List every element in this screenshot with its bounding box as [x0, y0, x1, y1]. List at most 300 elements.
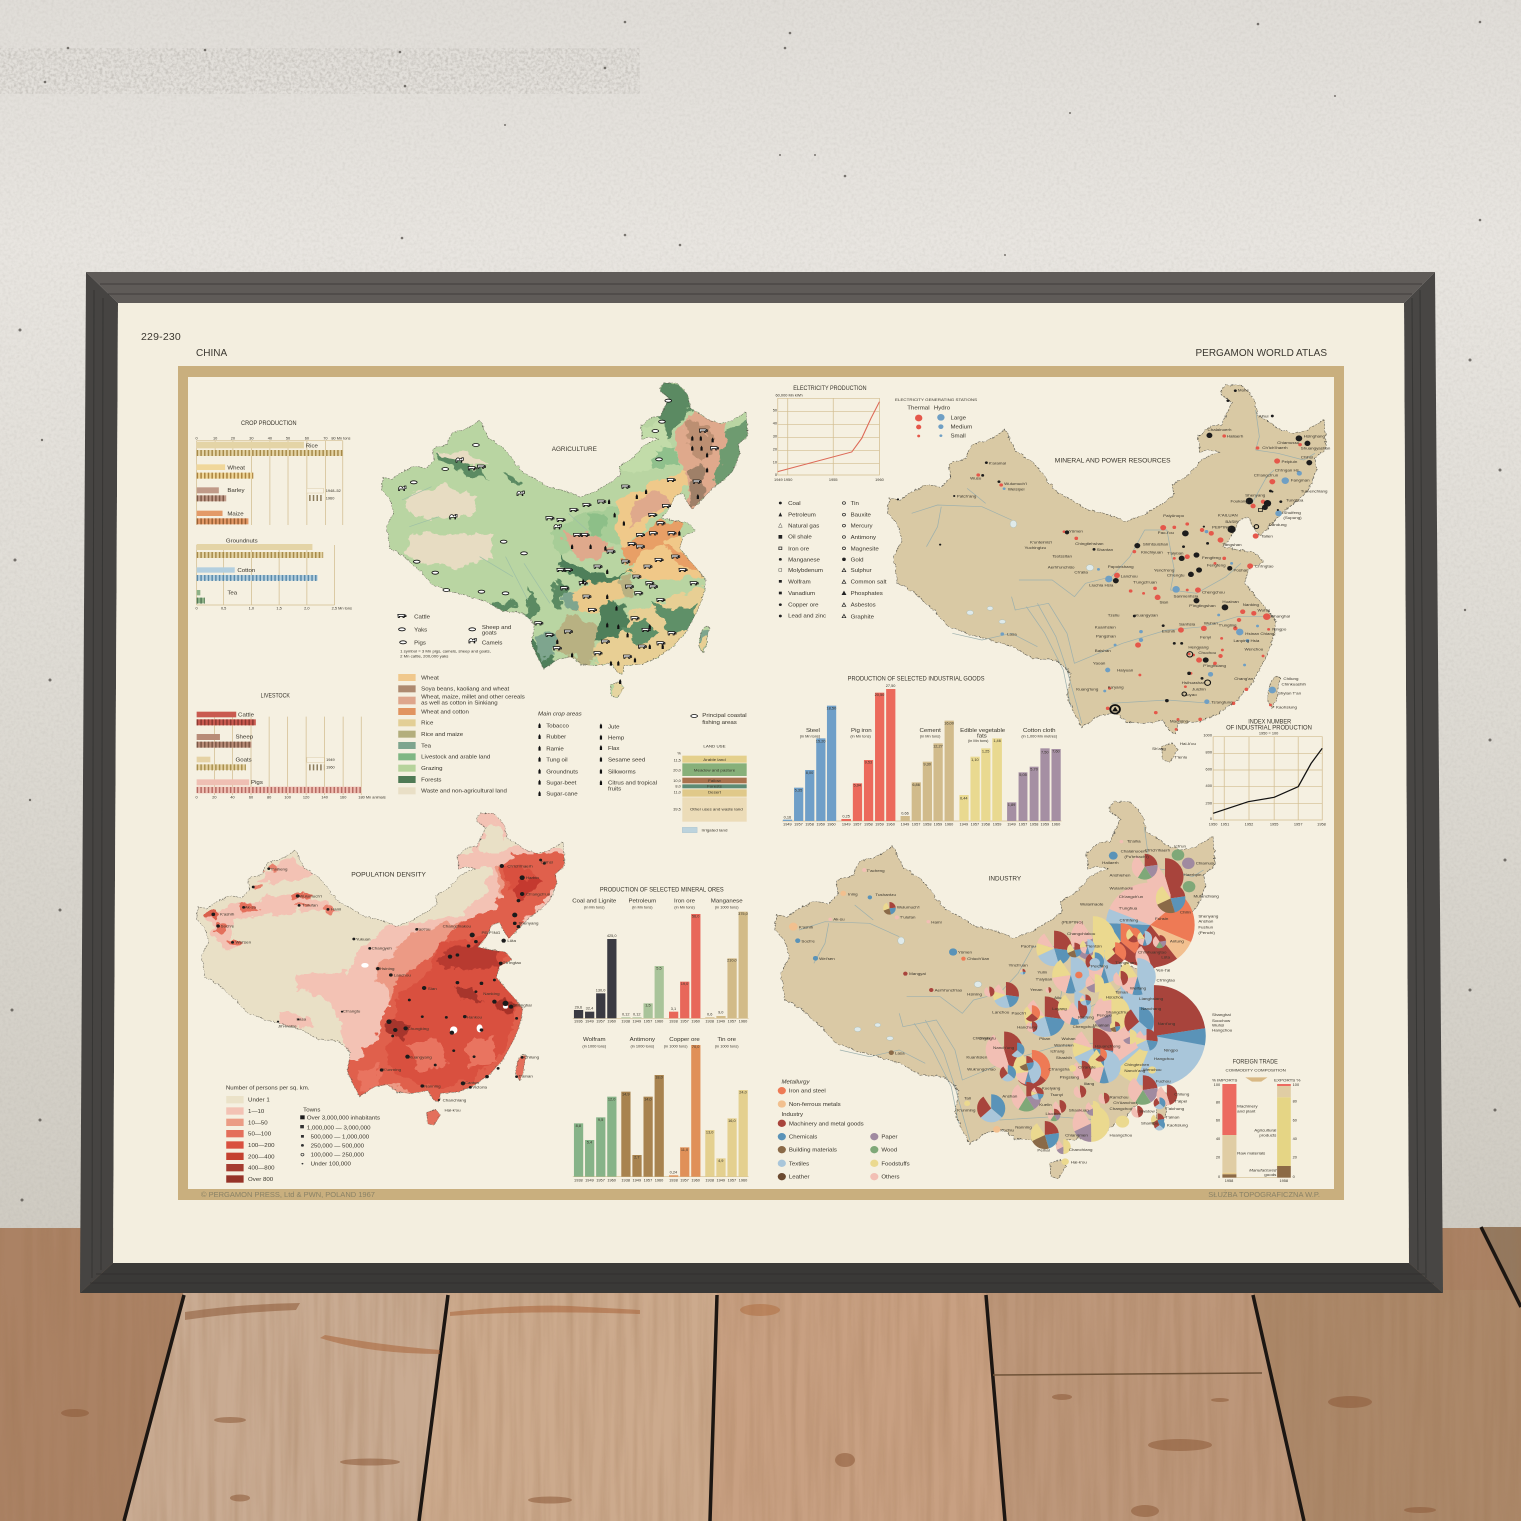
crop production chart: 50	[286, 436, 290, 440]
industry city names: Lasa	[895, 1051, 905, 1055]
production of selected industrial goods chart: 7,60	[1052, 749, 1060, 753]
mineral and power map: Poshan	[1233, 568, 1249, 573]
livestock chart: Goats	[235, 758, 252, 764]
mineral symbols legend: Copper ore	[788, 603, 819, 609]
population density map: Ch'angch'un	[526, 892, 551, 896]
towns legend: 250,000 — 500,000	[311, 1144, 364, 1149]
production of selected industrial goods chart: 1959	[875, 822, 884, 826]
population density map: Wei'sen	[235, 940, 252, 944]
mineral and power map: Tangshan	[1222, 542, 1242, 547]
mineral and power map: Ch'ingan Hs.	[1275, 468, 1300, 472]
industry city names: Ich'un	[1174, 844, 1187, 849]
production of selected mineral ores chart: 1938	[705, 1020, 714, 1024]
livestock symbol legend: 2 Mn cattle, 200,000 yaks	[400, 654, 448, 659]
production of selected industrial goods chart: 1,25	[982, 750, 989, 754]
production of selected industrial goods chart: 1958	[805, 822, 814, 826]
foreign trade chart: 80	[1216, 1100, 1220, 1104]
industry city names: Pingsiang	[1060, 1075, 1080, 1079]
main crop areas legend: Ramie	[546, 747, 564, 752]
livestock symbol legend: goats	[482, 631, 497, 637]
crop production chart: 70	[323, 436, 328, 440]
population density map: Ak-su	[245, 905, 257, 910]
industry city names: Anshiehen	[1110, 873, 1131, 878]
electricity production chart	[773, 385, 884, 482]
mineral and power map: Kuanhsien	[1095, 625, 1116, 630]
mineral and power map: Hsinghang	[1304, 434, 1326, 439]
population density map: Chilung	[524, 1055, 540, 1059]
production of selected mineral ores chart: 0,12	[622, 1012, 630, 1016]
foreign trade chart: 60	[1216, 1118, 1220, 1122]
production of selected mineral ores chart: Tin ore	[717, 1037, 736, 1043]
mineral and power map: Wusu	[970, 476, 982, 480]
livestock chart: 20	[212, 796, 217, 800]
index number of industrial production chart: 1952	[1245, 822, 1253, 826]
industry city names: Soochow	[1212, 1018, 1231, 1023]
livestock symbol legend	[398, 614, 511, 659]
population density map: Jih-k'atse	[278, 1024, 297, 1028]
population density map: K'ashih	[220, 912, 235, 917]
production of selected mineral ores chart: Manganese	[711, 899, 743, 904]
crop production chart: 0,5	[221, 606, 226, 610]
production of selected mineral ores chart: 1957	[728, 1020, 736, 1024]
industry city names: T'unghua	[1119, 906, 1138, 910]
industry city names: Ch'angsha	[1049, 1067, 1070, 1072]
foreign trade chart: 1958	[1279, 1179, 1288, 1183]
production of selected mineral ores chart: 1960	[655, 1178, 663, 1182]
production of selected industrial goods chart: 5,35	[795, 788, 802, 792]
production of selected industrial goods chart: 1949	[842, 822, 851, 826]
livestock chart: 160	[340, 796, 346, 800]
foreign trade chart: 40	[1216, 1137, 1220, 1141]
land-type colour legend: Waste and non-agricultural land	[421, 789, 507, 795]
crop production chart: 10	[213, 436, 217, 440]
persons per square km legend: 1—10	[248, 1109, 264, 1115]
production of selected mineral ores chart: 1957	[596, 1178, 605, 1182]
industry city names: Lüta	[1161, 955, 1171, 959]
production of selected industrial goods chart: 9,53	[865, 760, 872, 764]
mineral and power map: Kuang'lung	[1076, 687, 1099, 692]
crop production chart: 30	[249, 436, 254, 440]
electricity production chart: 1955	[829, 478, 838, 482]
population density map: PEIP'ING	[481, 930, 500, 935]
population density map: Hsining	[380, 966, 395, 971]
crop production chart: 1948–52	[326, 489, 341, 493]
mineral and power map: Papoinshang	[1108, 564, 1134, 569]
industry city names: Changchou	[1110, 1106, 1133, 1111]
production of selected mineral ores chart: 0,24	[670, 1170, 677, 1174]
industry city names: Liuchou	[1046, 1111, 1062, 1116]
production of selected industrial goods chart: 1958	[981, 822, 990, 826]
industry city names: Hsuanch'eng	[1095, 1044, 1121, 1048]
industry city names: Paot'ou	[1021, 944, 1036, 949]
mineral and power map: Ch'ingtao	[1255, 564, 1274, 568]
livestock symbol legend: Yaks	[414, 628, 427, 634]
industry city names: Nant'ung	[1158, 1021, 1176, 1026]
mineral symbols legend: Gold	[851, 558, 863, 563]
mineral and power map: Nanking	[1243, 602, 1260, 607]
production of selected industrial goods chart: 6,86	[912, 783, 920, 787]
mineral symbols legend: Vanadium	[788, 591, 815, 597]
mineral and power map: Hailaerh	[1227, 434, 1244, 438]
mineral and power map: Juichin	[1192, 687, 1207, 691]
production of selected mineral ores chart: 1957	[644, 1178, 652, 1182]
production of selected industrial goods chart: 1959	[993, 822, 1001, 826]
population density map: Harbin	[526, 875, 540, 880]
industry city names: Tsinan	[1115, 990, 1129, 994]
mineral and power map: Ch'angch'un	[1254, 473, 1279, 478]
main crop areas legend: Tobacco	[546, 724, 569, 730]
atlas name: PERGAMON WORLD ATLAS	[1195, 348, 1327, 359]
production of selected mineral ores chart: 1949	[633, 1178, 641, 1182]
industry city names: Anshan	[1002, 1094, 1018, 1098]
production of selected mineral ores chart: 3,1	[671, 1007, 676, 1011]
mineral and power map: Wuhsi	[1258, 608, 1270, 612]
mineral and power map: Shuifeng	[1283, 510, 1302, 515]
livestock chart: 40	[230, 796, 235, 800]
production of selected industrial goods chart: 1960	[1052, 822, 1060, 826]
mineral and power map: Fengfeng	[1202, 555, 1221, 560]
industry city names: Ts'aiha	[1127, 839, 1141, 844]
production of selected mineral ores chart: 1957	[644, 1020, 652, 1024]
industry city names: Kuanhsien	[966, 1055, 988, 1059]
production of selected mineral ores chart: 1938	[669, 1020, 678, 1024]
mineral symbols legend: Molybdenum	[788, 568, 823, 574]
land use chart: Meadow and pasture	[694, 768, 736, 772]
mineral and power map: Chingtiehshan	[1075, 541, 1104, 546]
industry city names: Ich'ang	[1050, 1049, 1065, 1053]
crop production chart: Tea	[227, 591, 238, 597]
mineral and power map: Sian	[1159, 600, 1169, 604]
mineral and power map: Aerhl'unchiüo	[1048, 565, 1075, 570]
persons per square km legend: 100—200	[248, 1143, 274, 1149]
production of selected mineral ores chart: 5,4	[587, 1141, 592, 1145]
livestock symbol legend: Sheep and	[482, 625, 511, 631]
industry city names: Ch'engtu	[978, 1036, 997, 1040]
land use chart: 11,5	[674, 758, 681, 762]
livestock chart: Sheep	[235, 735, 253, 740]
production of selected mineral ores chart: 8,8	[576, 1124, 581, 1128]
production of selected mineral ores chart: 1938	[669, 1178, 678, 1182]
mineral and power map: Tunghua	[1286, 498, 1304, 503]
index number of industrial production chart: 0	[1210, 817, 1212, 821]
industry city names: Wuhan	[1061, 1036, 1076, 1041]
mineral and power map: Shanghai	[1271, 614, 1290, 619]
industry pie legend	[778, 1080, 910, 1181]
mineral and power map: Hai-k'ou	[1180, 741, 1197, 746]
main crop areas legend: Sugar-cane	[546, 792, 578, 798]
industry city names: T'angshan	[1115, 960, 1136, 965]
industry city names: Chingtechen	[1124, 1062, 1150, 1067]
mineral and power map: Yaoan	[1093, 661, 1106, 665]
mineral and power map: Maoming	[1170, 719, 1189, 724]
mineral and power map: Kinchiyuan	[1141, 550, 1163, 555]
electricity production chart: 1949 1950	[774, 478, 792, 482]
mineral and power map: Liuchia Hsia	[1089, 583, 1114, 588]
mineral symbols legend: Wolfram	[788, 580, 811, 585]
production of selected industrial goods chart: 18,50	[827, 706, 836, 710]
land-type colour legend	[398, 674, 525, 795]
industry city names: Shenyang	[1198, 914, 1219, 919]
main crop areas legend: Tung oil	[546, 758, 568, 763]
mineral symbols legend: Magnesite	[851, 547, 879, 552]
industry pie legend: Machinery and metal goods	[789, 1122, 864, 1127]
land-type colour legend: Livestock and arable land	[421, 755, 490, 761]
industry city names: Yümen	[958, 950, 973, 954]
industry city names: T'aichung	[1165, 1106, 1185, 1111]
land-type colour legend: Tea	[421, 744, 432, 749]
industry city names: Weifang	[1130, 986, 1147, 990]
production of selected industrial goods chart: 1960	[827, 822, 836, 826]
production of selected mineral ores chart: 11,0	[681, 1148, 688, 1152]
production of selected industrial goods chart: 1958	[1030, 822, 1038, 826]
industry city names: Hangchou	[1154, 1056, 1175, 1061]
index number of industrial production chart: 400	[1206, 784, 1212, 788]
mineral symbols legend: Mercury	[851, 524, 873, 530]
industry city names: Shaokuan	[1069, 1108, 1090, 1113]
sheet title: CHINA	[196, 348, 227, 359]
foreign trade chart: Raw materials	[1237, 1151, 1265, 1155]
production of selected mineral ores chart: 9,5	[598, 1118, 603, 1122]
production of selected industrial goods chart: 1959	[1041, 822, 1049, 826]
industry city names: Wulumuch'i	[897, 905, 920, 909]
main crop areas legend: Citrus and tropical	[608, 781, 657, 786]
mineral and power map: Chihsi	[1301, 455, 1313, 459]
mineral symbols legend: Manganese	[788, 558, 820, 563]
index number of industrial production chart: INDEX NUMBER	[1248, 719, 1292, 725]
crop production chart: 80 Mn tons	[331, 436, 351, 440]
production of selected industrial goods chart: 0,16	[784, 816, 791, 820]
production of selected industrial goods chart: 1957	[912, 822, 920, 826]
electricity production chart: 10	[773, 461, 777, 465]
mineral and power map: Sanmenhsia	[1174, 594, 1199, 599]
land use chart: 10,0	[673, 779, 681, 783]
mineral and power map: Foukang	[1231, 499, 1248, 504]
foreign trade chart: 0	[1218, 1175, 1220, 1179]
population density map: Soch'e	[221, 924, 235, 929]
mineral and power map: Chiamussu	[1277, 440, 1300, 445]
frame left rail	[80, 272, 118, 1293]
crop production chart	[196, 420, 352, 610]
population density map: Nanking	[483, 991, 500, 996]
population density map: Ch'ingtao	[503, 960, 522, 965]
foreign trade chart: 100	[1214, 1083, 1220, 1087]
population density map: Chungking	[407, 1026, 429, 1031]
persons per square km legend: 10—50	[248, 1121, 268, 1126]
mineral and power map: Shuangyashan	[1301, 446, 1331, 450]
main crop areas legend: Hemp	[608, 736, 624, 742]
industry city names: Loyang	[1052, 1006, 1067, 1011]
foreign trade chart: goods	[1264, 1172, 1276, 1177]
electricity production chart: 0	[775, 473, 777, 477]
industry city names: T'ulufan	[900, 915, 916, 920]
mineral and power map: Ts'angtung	[1211, 700, 1233, 704]
crop production chart: 20	[231, 436, 235, 440]
industry city names: Chiamusu	[1196, 861, 1216, 865]
mineral and power map: Aihui	[1259, 414, 1269, 418]
livestock chart: LIVESTOCK	[261, 693, 291, 699]
industry city names: Peihai	[1037, 1148, 1050, 1153]
population density map: Hami	[331, 907, 341, 912]
production of selected mineral ores chart: 14,0	[644, 1098, 652, 1102]
industry city names: Hanchung	[1017, 1025, 1038, 1029]
population density map	[197, 810, 572, 1143]
land-type colour legend: Forests	[421, 778, 442, 783]
livestock chart: 0	[196, 796, 198, 800]
land use chart: Fallow	[708, 778, 722, 783]
production of selected mineral ores chart: (in 1000 tons)	[715, 906, 739, 910]
foreign trade chart: 80	[1293, 1100, 1297, 1104]
main crop areas legend: Groundnuts	[546, 770, 578, 775]
population density map: Lasa	[297, 1017, 307, 1022]
mineral and power map: T'ienlu	[1174, 755, 1188, 760]
production of selected mineral ores chart: 0,12	[633, 1012, 641, 1016]
crop production chart: Wheat	[227, 466, 245, 471]
industry city names: T'ientsin	[1086, 944, 1103, 948]
mineral and power map: Tzeliu	[1108, 613, 1120, 618]
production of selected industrial goods chart: Pig iron	[851, 728, 872, 734]
electricity production chart: 20	[773, 448, 777, 452]
mineral and power map: Tsotssitan	[1052, 554, 1073, 559]
mineral and power map: Chengchou	[1202, 590, 1225, 594]
land use chart: Irrigated land	[702, 828, 728, 833]
index number of industrial production chart	[1203, 719, 1326, 826]
industry city names: Iliang	[1084, 1081, 1095, 1086]
towns legend: 1,000,000 — 3,000,000	[307, 1126, 371, 1131]
mineral symbols legend: Sulphur	[851, 568, 872, 574]
land use chart: %	[677, 751, 682, 755]
main crop areas legend: Jute	[608, 725, 619, 730]
production of selected mineral ores chart: 1949	[633, 1020, 641, 1024]
livestock chart: 80	[267, 796, 271, 800]
industry city names: Ining	[848, 892, 858, 896]
mineral symbols legend: Antimony	[851, 535, 876, 541]
city industry pies	[789, 840, 1195, 1165]
electricity production chart: 40	[773, 421, 777, 425]
crop production chart: 0	[196, 606, 198, 610]
industry city names: Antung	[1170, 939, 1185, 943]
production of selected industrial goods chart: 0,44	[960, 796, 968, 800]
industry city names: Yinch'uan	[1009, 963, 1028, 968]
industry city names: Ailu	[1054, 995, 1062, 1000]
mineral and power map: Tumenchiang	[1301, 489, 1328, 493]
persons per square km legend: Under 1	[248, 1098, 270, 1104]
Shanghai-region pie	[1128, 1011, 1180, 1061]
production of selected mineral ores chart: 1938	[705, 1178, 714, 1182]
population density map: Hankou	[467, 1015, 483, 1019]
index number of industrial production chart: OF INDUSTRIAL PRODUCTION	[1226, 725, 1312, 732]
mineral symbols legend: Graphite	[851, 615, 874, 620]
population density map: K'unming	[383, 1067, 402, 1072]
main crop areas legend: Silkworms	[608, 770, 636, 776]
mineral and power map: Yench'eng	[1154, 568, 1175, 573]
panel: mineral and power resources with electricity and industrial charts	[772, 384, 1331, 826]
production of selected mineral ores chart: 14,9	[622, 1092, 630, 1096]
crop production chart: 1960	[326, 496, 334, 500]
frame right rail	[1404, 272, 1443, 1293]
production of selected mineral ores chart: 1957	[596, 1020, 605, 1024]
industry city names: Yulin	[1037, 970, 1048, 974]
livestock chart: Cattle	[238, 713, 254, 718]
production of selected industrial goods chart: 16,00	[944, 721, 954, 725]
production of selected mineral ores chart: 24,0	[739, 1091, 747, 1095]
production of selected mineral ores chart: 16,0	[728, 1119, 736, 1123]
population density map: Changchiakou	[443, 924, 472, 928]
mineral and power map: Fenyi	[1200, 635, 1211, 640]
production of selected mineral ores chart: 1957	[680, 1178, 689, 1182]
production of selected mineral ores chart: Iron ore	[674, 899, 695, 904]
industry city names: Lianghsiang	[1139, 996, 1164, 1001]
population density map: Sian	[428, 986, 437, 991]
industry city names: Aerhl'unch'iao	[935, 988, 963, 992]
main crop areas legend	[538, 712, 747, 798]
index number of industrial production chart: 1951	[1221, 822, 1229, 826]
index number of industrial production chart: 1958	[1317, 822, 1326, 826]
production of selected mineral ores chart: 4,9	[718, 1159, 723, 1163]
population density map: Paot'ou	[416, 927, 431, 931]
land-type colour legend: Soya beans, kaoliang and wheat	[421, 687, 510, 693]
industry map: INDUSTRY	[989, 876, 1022, 883]
mineral and power map: K'aramai	[989, 461, 1006, 465]
industry city names: Yen-t'ai	[1156, 968, 1170, 972]
mineral and power map: Hsihuashan	[1182, 680, 1206, 685]
mineral and power map: Chinkuashih	[1282, 682, 1307, 686]
mineral and power map: Wulumuch'i	[1004, 481, 1027, 486]
mineral symbols legend: Asbestos	[851, 603, 876, 609]
industry city names	[799, 839, 1233, 1164]
mineral and power map: Wuhan	[1204, 621, 1219, 625]
mineral and power map: Shenyang	[1245, 493, 1266, 497]
industry city names: Wulanhaote	[1080, 902, 1104, 907]
production of selected industrial goods chart: 5,70	[1030, 768, 1038, 772]
panel: agriculture with crop production and livestock charts	[196, 382, 749, 833]
population density map: Wulumuch'i	[299, 894, 322, 898]
production of selected mineral ores chart: 210,0	[727, 959, 737, 963]
industry pie legend: Non-ferrous metals	[789, 1102, 841, 1108]
production of selected mineral ores chart: Antimony	[630, 1037, 655, 1043]
production of selected mineral ores chart: (in 1000 tons)	[582, 1044, 606, 1048]
land use chart: Forests	[707, 784, 722, 789]
industry city names: Chanchiang	[1069, 1147, 1093, 1152]
electricity generating stations legend: Hydro	[934, 406, 950, 411]
production of selected mineral ores chart: 0,6	[707, 1012, 712, 1016]
production of selected mineral ores chart: 1949	[585, 1178, 594, 1182]
mineral symbols legend: Lead and zinc	[788, 614, 826, 620]
industry city names: (Penchi)	[1198, 930, 1215, 935]
industry city names: Wei'sen	[819, 956, 835, 961]
production of selected industrial goods chart: 1,10	[971, 758, 979, 762]
mineral and power map: Ningpo	[1272, 627, 1287, 632]
production of selected industrial goods chart: Edible vegetable	[960, 728, 1005, 734]
industry city names: Fuhsin	[1155, 916, 1169, 921]
panel: industry map with pie charts and foreign trade	[774, 800, 1301, 1183]
mineral symbols legend: Phosphates	[851, 591, 883, 597]
industry pie legend: Paper	[881, 1135, 898, 1141]
production of selected mineral ores chart: 130,0	[596, 988, 605, 992]
crop production chart: 2,5 Mn tons	[332, 606, 352, 610]
land-type colour legend: Wheat	[421, 676, 439, 681]
production of selected mineral ores chart: 1960	[607, 1178, 616, 1182]
industry city names: Nanch'ang	[1124, 1068, 1146, 1073]
production of selected mineral ores chart: 1957	[728, 1178, 736, 1182]
industry city names: Shashih	[1056, 1055, 1073, 1060]
electricity production chart: 50	[773, 408, 777, 412]
industry city names: Wanhsien	[1054, 1043, 1074, 1048]
industry city names: Haerhpin	[1184, 872, 1202, 877]
production of selected industrial goods chart: Steel	[806, 728, 820, 734]
wooden floor planks	[0, 1227, 1521, 1521]
electricity generating stations legend: ELECTRICITY GENERATING STATIONS	[895, 397, 977, 402]
persons per square km legend: 400—800	[248, 1166, 274, 1172]
